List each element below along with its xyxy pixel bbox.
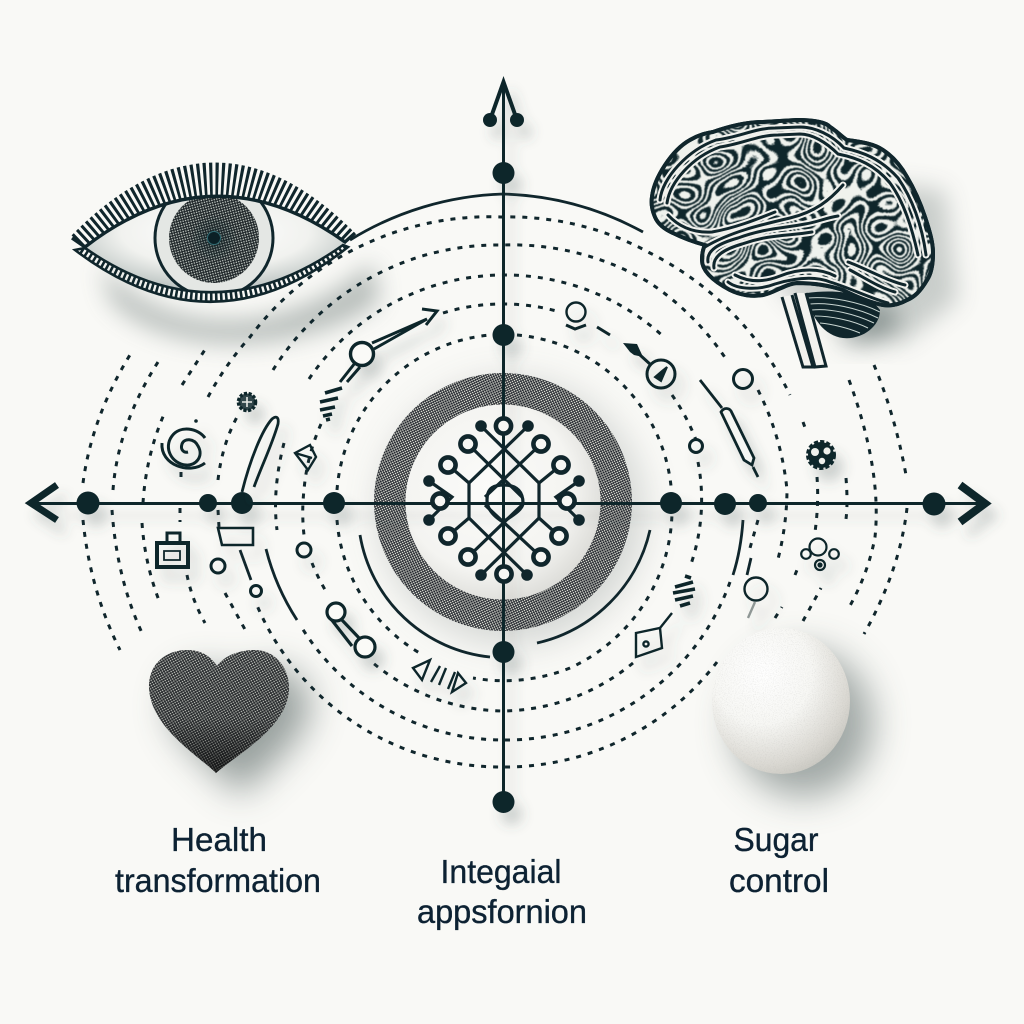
- label: Health transformation: [115, 821, 321, 899]
- cerebellum: [807, 292, 880, 338]
- arrow: left: [31, 485, 57, 520]
- icon: striped ball right: [673, 576, 695, 606]
- icon: double triangles: [413, 660, 466, 692]
- axis nodes: [76, 162, 946, 813]
- label: Sugar control: [729, 821, 829, 899]
- solid arcs: [240, 194, 751, 657]
- icon: gear blob right: [808, 442, 834, 468]
- small icons: [157, 302, 839, 692]
- icon: brain: [640, 110, 940, 367]
- label: Sugar control: control: [729, 862, 829, 899]
- icon: gear blob left: [238, 394, 256, 410]
- icon: triangle marker: [295, 445, 316, 470]
- icon: diamond tag: [636, 613, 672, 657]
- dash: [597, 327, 610, 335]
- icon: ring with stem: [744, 578, 768, 618]
- icon: striped cone: [320, 388, 342, 420]
- pupil: [208, 232, 220, 244]
- label: Integaial appsfornion: Integaial: [440, 853, 562, 890]
- label: Health transformation: transformation: [115, 862, 321, 899]
- icon: heart: [149, 650, 289, 773]
- icon: spiral: [162, 429, 205, 468]
- lower lashes: [75, 247, 348, 297]
- brain stem: [782, 293, 826, 367]
- icon: capsule: [700, 380, 758, 477]
- icon: arrow with ring: [340, 309, 437, 382]
- icon: rectangle: [218, 528, 253, 545]
- central dotted ring: [374, 373, 632, 631]
- icon: eye: [70, 176, 355, 302]
- arrow: right: [960, 485, 985, 522]
- cortex: [652, 120, 933, 305]
- label: Sugar control: Sugar: [734, 821, 819, 858]
- label: Health transformation: Health: [171, 821, 267, 858]
- icon: dumbbell connector: [327, 603, 375, 657]
- icon: central circuit snowflake: [423, 418, 585, 582]
- horizontal axis: [34, 502, 985, 505]
- soft shadows: [100, 165, 958, 797]
- icon: target with pointer: [623, 343, 675, 388]
- icon: ring cluster: [801, 538, 839, 570]
- upper lashes: [70, 176, 355, 251]
- label: Integaial appsfornion: appsfornion: [417, 893, 587, 930]
- iris: [169, 193, 259, 283]
- icon: lock box: [157, 533, 188, 567]
- icon: rosette ring: [566, 302, 586, 329]
- arrow: up: [483, 82, 524, 127]
- label: Integaial appsfornion: [417, 853, 587, 930]
- icon: small rings: [211, 370, 752, 596]
- concentric dashed orbits: [83, 217, 907, 767]
- vertical axis: [502, 84, 505, 802]
- axes with nodes and arrowheads: [31, 82, 985, 813]
- icon: long capsule: [242, 417, 278, 492]
- icon: sugar ball: [712, 628, 850, 774]
